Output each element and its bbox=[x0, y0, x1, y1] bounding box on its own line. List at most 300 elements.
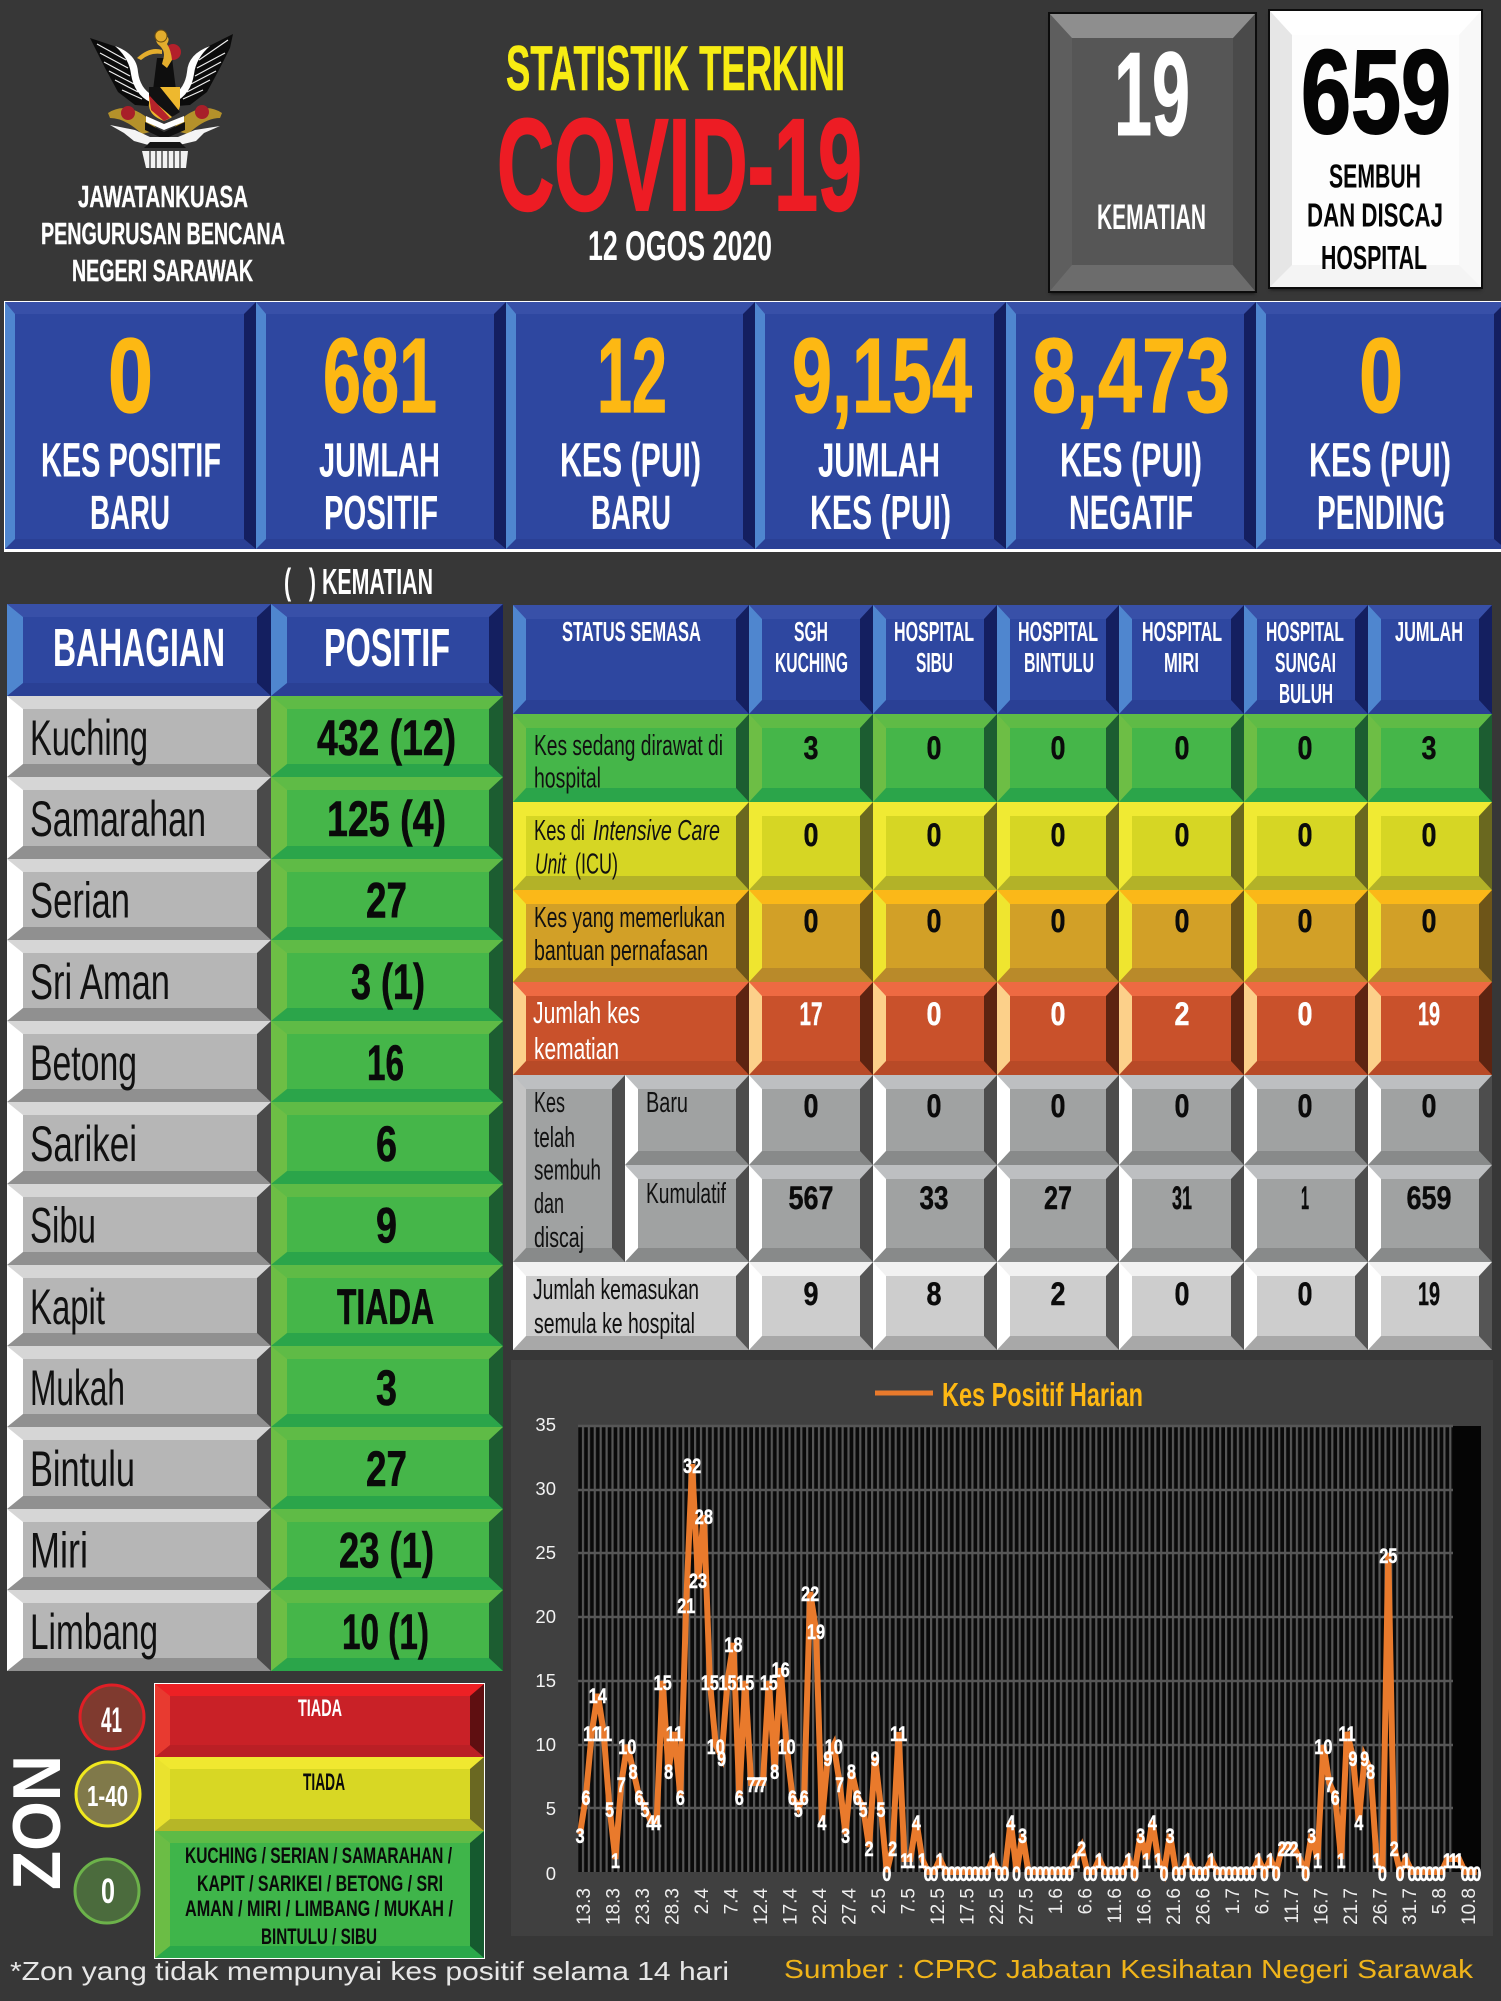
table values: 0 bbox=[926, 730, 942, 766]
table headings: BAHAGIAN bbox=[53, 618, 225, 678]
data labels: 5 bbox=[794, 1798, 803, 1821]
row: cases in hospital bbox=[513, 714, 1492, 802]
table values: 0 bbox=[804, 817, 818, 853]
data labels: 0 bbox=[1106, 1862, 1116, 1885]
row labels: Kumulatif bbox=[646, 1178, 727, 1210]
row: Kapit bbox=[7, 1265, 503, 1346]
table values: 19 bbox=[1418, 1276, 1440, 1312]
footnote: *Zon yang tidak mempunyai kes positif selama 14 hari bbox=[10, 1956, 729, 1986]
x axis date labels: 12.4 bbox=[751, 1888, 772, 1925]
data labels: 5 bbox=[859, 1798, 868, 1821]
data labels: 0 bbox=[1189, 1862, 1198, 1885]
x axis date labels: 21.6 bbox=[1164, 1888, 1185, 1925]
x axis date labels: 2.5 bbox=[869, 1888, 890, 1914]
row labels bbox=[533, 730, 727, 1340]
line: daily positive cases bbox=[580, 1464, 1477, 1872]
division names: Kapit bbox=[30, 1279, 105, 1335]
table values: 0 bbox=[804, 903, 818, 939]
column headings: SGH bbox=[794, 616, 828, 647]
positive counts: 23 (1) bbox=[339, 1522, 434, 1578]
data labels: 7 bbox=[617, 1773, 626, 1796]
card numbers: 8,473 bbox=[1032, 317, 1230, 435]
card: kes pui pending bbox=[1256, 302, 1501, 549]
card: kes pui baru bbox=[506, 302, 755, 549]
table values: 0 bbox=[1298, 817, 1312, 853]
data labels: 1 bbox=[1313, 1849, 1322, 1872]
data labels: 0 bbox=[1047, 1862, 1057, 1885]
data labels: 2 bbox=[1278, 1837, 1287, 1860]
table values: 1 bbox=[1301, 1180, 1309, 1216]
data labels: 22 bbox=[801, 1582, 819, 1605]
data labels: 8 bbox=[770, 1760, 779, 1783]
data labels: 0 bbox=[994, 1862, 1003, 1885]
row: readmissions bbox=[513, 1262, 1492, 1350]
data labels: 9 bbox=[1360, 1747, 1369, 1770]
x axis date labels: 22.5 bbox=[987, 1888, 1008, 1925]
card numbers bbox=[108, 317, 1403, 435]
zone indicator: 1 to 40 cases: 1-40 bbox=[87, 1781, 128, 1813]
data labels: 0 bbox=[1024, 1862, 1033, 1885]
data labels: 9 bbox=[717, 1747, 726, 1770]
positive counts: 125 (4) bbox=[327, 791, 446, 847]
row labels: Jumlah kemasukan bbox=[533, 1274, 699, 1306]
data labels: 0 bbox=[1407, 1862, 1416, 1885]
data labels: 10 bbox=[825, 1735, 843, 1758]
column headings: HOSPITAL bbox=[894, 616, 974, 647]
positive counts: TIADA bbox=[337, 1279, 434, 1335]
data labels: 1 bbox=[906, 1849, 915, 1872]
data labels: 0 bbox=[1053, 1862, 1062, 1885]
red zone text: TIADA bbox=[298, 1695, 342, 1722]
table values: 0 bbox=[1422, 903, 1436, 939]
table values: 0 bbox=[1298, 1088, 1312, 1124]
row: Betong bbox=[7, 1021, 503, 1102]
x axis date labels: 1.6 bbox=[1046, 1888, 1067, 1914]
plot area bbox=[578, 1426, 1481, 1872]
x axis date labels: 18.3 bbox=[604, 1888, 624, 1925]
x axis date labels: 1.7 bbox=[1223, 1888, 1244, 1914]
x axis date labels: 11.6 bbox=[1105, 1888, 1126, 1924]
data labels: 6 bbox=[634, 1786, 644, 1809]
data labels: 21 bbox=[677, 1594, 695, 1617]
row labels: Kes di bbox=[534, 815, 585, 847]
card labels: KES POSITIF bbox=[41, 434, 221, 488]
data labels: 0 bbox=[1065, 1862, 1074, 1885]
data labels: 0 bbox=[1230, 1862, 1239, 1885]
data labels: 1 bbox=[1142, 1849, 1151, 1872]
heading: statistik terkini: STATISTIK TERKINI bbox=[506, 34, 845, 104]
zone indicator: 1 to 40 cases bbox=[76, 1762, 140, 1826]
data labels: 1 bbox=[611, 1849, 620, 1872]
data labels: 2 bbox=[888, 1837, 897, 1860]
data labels: 0 bbox=[1195, 1862, 1204, 1885]
y axis labels: 5 bbox=[546, 1798, 556, 1819]
data labels: 1 bbox=[1443, 1849, 1452, 1872]
x axis date labels: 31.7 bbox=[1400, 1888, 1421, 1925]
data labels: 0 bbox=[882, 1862, 891, 1885]
data labels: 0 bbox=[1419, 1862, 1428, 1885]
table values: 3 bbox=[1422, 730, 1436, 766]
data labels: 0 bbox=[1036, 1862, 1045, 1885]
row labels: Unit bbox=[535, 849, 567, 881]
table values: 0 bbox=[804, 1088, 818, 1124]
data labels: 6 bbox=[676, 1786, 685, 1809]
data labels: 0 bbox=[1431, 1862, 1440, 1885]
data labels: 0 bbox=[971, 1862, 980, 1885]
data labels: 4 bbox=[1006, 1811, 1016, 1834]
x axis date labels: 16.7 bbox=[1312, 1888, 1332, 1925]
data labels: 0 bbox=[924, 1862, 933, 1885]
table values: 0 bbox=[1298, 903, 1312, 939]
panel: deaths bbox=[1050, 14, 1255, 291]
data labels: 7 bbox=[1325, 1773, 1334, 1796]
data labels: 18 bbox=[724, 1633, 743, 1656]
division names: Betong bbox=[30, 1035, 137, 1091]
table values: 0 bbox=[1174, 817, 1190, 853]
text: committee name: PENGURUSAN BENCANA bbox=[41, 216, 285, 251]
row: recovered cumulative bbox=[625, 1165, 1492, 1262]
division names: Mukah bbox=[30, 1360, 125, 1416]
table values: 0 bbox=[1050, 903, 1066, 939]
positive counts: 3 (1) bbox=[351, 954, 425, 1010]
division names: Miri bbox=[30, 1522, 88, 1578]
zone indicator: 0 cases bbox=[75, 1859, 139, 1923]
data labels: 1 bbox=[1207, 1849, 1216, 1872]
x axis date labels: 26.7 bbox=[1370, 1888, 1392, 1925]
data labels: 1 bbox=[1095, 1849, 1104, 1872]
row: Serian bbox=[7, 859, 503, 940]
note: brackets mean deaths: ( ) KEMATIAN bbox=[284, 561, 433, 602]
data labels: 0 bbox=[1272, 1862, 1281, 1885]
x axis date labels: 26.6 bbox=[1194, 1888, 1214, 1925]
data labels: 0 bbox=[1171, 1862, 1180, 1885]
x axis date labels: 27.4 bbox=[840, 1888, 860, 1925]
death row values bbox=[800, 996, 1440, 1032]
chart legend: Kes Positif Harian bbox=[942, 1376, 1143, 1413]
zone row: green bbox=[155, 1831, 484, 1958]
card labels: BARU bbox=[90, 487, 170, 540]
death row values: 0 bbox=[1298, 996, 1312, 1032]
data labels: 0 bbox=[1260, 1862, 1269, 1885]
source: Sumber : CPRC Jabatan Kesihatan Negeri Sarawak bbox=[784, 1954, 1474, 1984]
data labels: 0 bbox=[1201, 1862, 1210, 1885]
table values: 0 bbox=[1422, 817, 1436, 853]
table values: 8 bbox=[926, 1276, 942, 1312]
data labels: 0 bbox=[1437, 1862, 1446, 1885]
y axis labels bbox=[535, 1414, 556, 1884]
data labels: 0 bbox=[1248, 1862, 1257, 1885]
data labels: 1 bbox=[1337, 1849, 1346, 1872]
panel: hospital status table bbox=[513, 605, 1492, 1350]
green zone text: BINTULU / SIBU bbox=[261, 1924, 377, 1949]
data labels: 11 bbox=[1338, 1722, 1356, 1745]
data labels: 0 bbox=[1213, 1862, 1222, 1885]
green zone text: AMAN / MIRI / LIMBANG / MUKAH / bbox=[185, 1896, 454, 1921]
data labels: 0 bbox=[1101, 1862, 1110, 1885]
x axis date labels: 6.7 bbox=[1252, 1888, 1274, 1914]
x axis date labels: 6.6 bbox=[1076, 1888, 1096, 1914]
row: recovered new bbox=[625, 1075, 1492, 1165]
panel: zone table bbox=[154, 1683, 485, 1959]
green zone text bbox=[185, 1843, 454, 1949]
division names: Sarikei bbox=[30, 1116, 137, 1172]
death row values: 2 bbox=[1174, 996, 1190, 1032]
row labels: bantuan pernafasan bbox=[534, 935, 708, 967]
green zone text: KUCHING / SERIAN / SAMARAHAN / bbox=[185, 1843, 453, 1868]
data labels: 0 bbox=[1413, 1862, 1422, 1885]
data labels: 11 bbox=[666, 1722, 683, 1745]
x axis date labels: 28.3 bbox=[662, 1888, 684, 1925]
data labels: 2 bbox=[1077, 1837, 1086, 1860]
table values: 0 bbox=[1174, 1276, 1190, 1312]
label: sembuh dan discaj hospital bbox=[1307, 158, 1443, 276]
header: emblem and committee name bbox=[41, 30, 285, 288]
green zone text: KAPIT / SARIKEI / BETONG / SRI bbox=[197, 1871, 443, 1896]
data labels: 0 bbox=[1130, 1862, 1139, 1885]
division names: Bintulu bbox=[30, 1441, 135, 1497]
row: Limbang bbox=[7, 1590, 503, 1671]
data labels: 0 bbox=[1118, 1862, 1127, 1885]
table header row bbox=[513, 605, 1492, 714]
positive counts: 3 bbox=[376, 1360, 397, 1416]
division names: Limbang bbox=[30, 1604, 158, 1660]
data labels: 10 bbox=[1314, 1735, 1333, 1758]
data labels: 0 bbox=[1083, 1862, 1092, 1885]
data labels: 6 bbox=[581, 1786, 590, 1809]
table values: 0 bbox=[926, 817, 942, 853]
data labels: 7 bbox=[752, 1773, 762, 1796]
data labels: 0 bbox=[1160, 1862, 1169, 1885]
table values: 0 bbox=[1050, 1088, 1066, 1124]
data labels: 2 bbox=[1289, 1837, 1298, 1860]
data labels: 0 bbox=[977, 1862, 986, 1885]
panel: recovered and discharged bbox=[1270, 11, 1481, 287]
data labels: 2 bbox=[1283, 1837, 1293, 1860]
table values: 0 bbox=[1298, 730, 1312, 766]
death row values: 0 bbox=[1050, 996, 1066, 1032]
yellow zone text: TIADA bbox=[303, 1769, 345, 1796]
table values: 2 bbox=[1050, 1276, 1066, 1312]
y axis labels: 30 bbox=[535, 1478, 556, 1499]
text: committee name bbox=[41, 179, 285, 288]
data labels: 9 bbox=[870, 1747, 880, 1770]
card numbers: 0 bbox=[108, 317, 153, 435]
column headings bbox=[562, 616, 1463, 709]
data labels: 7 bbox=[747, 1773, 756, 1796]
card numbers: 12 bbox=[597, 317, 667, 435]
data labels: 3 bbox=[1307, 1824, 1316, 1847]
card labels: BARU bbox=[591, 487, 671, 540]
data labels: 0 bbox=[959, 1862, 968, 1885]
data labels: 10 bbox=[618, 1735, 636, 1758]
table headings: POSITIF bbox=[324, 618, 450, 678]
x axis date labels: 2.4 bbox=[692, 1888, 713, 1914]
zone indicator: 0 cases: 0 bbox=[101, 1872, 115, 1911]
y axis labels: 0 bbox=[546, 1863, 556, 1884]
row label: jumlah kes kematian bbox=[533, 995, 640, 1066]
row: Miri bbox=[7, 1509, 503, 1590]
data labels: 28 bbox=[695, 1505, 713, 1528]
data labels: 1 bbox=[1372, 1849, 1381, 1872]
column headings: STATUS SEMASA bbox=[562, 616, 701, 647]
data labels: 0 bbox=[929, 1862, 939, 1885]
data labels: 2 bbox=[1390, 1837, 1399, 1860]
data labels: 4 bbox=[646, 1811, 656, 1834]
data labels: 32 bbox=[683, 1454, 701, 1477]
x axis date labels: 21.7 bbox=[1341, 1888, 1362, 1925]
data labels: 0 bbox=[1059, 1862, 1068, 1885]
x axis date labels: 27.5 bbox=[1016, 1888, 1038, 1925]
data labels: 15 bbox=[760, 1671, 778, 1694]
card: jumlah kes pui bbox=[755, 302, 1006, 549]
data labels: 0 bbox=[1224, 1862, 1234, 1885]
data labels: 1 bbox=[1266, 1849, 1275, 1872]
x axis date labels: 16.6 bbox=[1134, 1888, 1156, 1925]
y axis labels: 20 bbox=[535, 1606, 556, 1627]
data labels: 0 bbox=[1466, 1862, 1475, 1885]
data labels: 23 bbox=[689, 1569, 707, 1592]
table values: 3 bbox=[804, 730, 818, 766]
x axis date labels: 17.5 bbox=[958, 1888, 978, 1925]
data labels: 15 bbox=[718, 1671, 737, 1694]
death row values: 17 bbox=[800, 996, 822, 1032]
data labels: 19 bbox=[807, 1620, 825, 1643]
card labels bbox=[41, 434, 1451, 540]
data labels: 10 bbox=[777, 1735, 796, 1758]
zone row: red bbox=[155, 1684, 484, 1757]
data labels: 9 bbox=[1348, 1747, 1357, 1770]
cell: recovered and discharged label bbox=[513, 1075, 625, 1262]
label: ZON: ZON bbox=[0, 1755, 75, 1890]
data labels: 5 bbox=[876, 1798, 885, 1821]
table values: 0 bbox=[1422, 1088, 1436, 1124]
data labels: 8 bbox=[629, 1760, 638, 1783]
card numbers: 681 bbox=[323, 317, 437, 435]
positive counts: 9 bbox=[376, 1198, 397, 1254]
data labels: 3 bbox=[575, 1824, 585, 1847]
card: kes positif baru bbox=[5, 302, 256, 549]
data labels: 1 bbox=[1449, 1849, 1458, 1872]
card labels: KES (PUI) bbox=[810, 487, 951, 540]
division names bbox=[30, 710, 206, 1660]
data labels: 0 bbox=[1378, 1862, 1387, 1885]
text: committee name: NEGERI SARAWAK bbox=[72, 253, 253, 288]
positive counts: 10 (1) bbox=[342, 1604, 429, 1660]
row: Mukah bbox=[7, 1346, 503, 1427]
x axis date labels: 17.4 bbox=[780, 1888, 802, 1925]
data labels: 6 bbox=[788, 1786, 797, 1809]
column headings: BULUH bbox=[1279, 678, 1333, 709]
data labels: 6 bbox=[1331, 1786, 1340, 1809]
death row values: 0 bbox=[926, 996, 942, 1032]
data labels: 0 bbox=[1301, 1862, 1310, 1885]
data labels: 5 bbox=[605, 1798, 614, 1821]
card labels: KES (PUI) bbox=[560, 434, 701, 488]
data labels: 0 bbox=[1112, 1862, 1121, 1885]
table values: 0 bbox=[1174, 903, 1190, 939]
row: Sri Aman bbox=[7, 940, 503, 1021]
data labels: 15 bbox=[736, 1671, 754, 1694]
data labels: 6 bbox=[800, 1786, 809, 1809]
zone row: yellow bbox=[155, 1757, 484, 1831]
panel: daily positive cases chart bbox=[511, 1360, 1493, 1936]
data labels: 3 bbox=[1136, 1824, 1145, 1847]
column headings: BINTULU bbox=[1024, 647, 1094, 678]
data labels: 3 bbox=[1018, 1824, 1027, 1847]
division names: Samarahan bbox=[30, 791, 206, 847]
data labels: 0 bbox=[1042, 1862, 1051, 1885]
data labels: 7 bbox=[758, 1773, 767, 1796]
row labels: telah bbox=[534, 1122, 575, 1154]
card labels: NEGATIF bbox=[1069, 487, 1193, 540]
table header row bbox=[7, 604, 503, 696]
data labels: 0 bbox=[941, 1862, 950, 1885]
row labels: Kes sedang dirawat di bbox=[534, 730, 723, 762]
table values: 9 bbox=[804, 1276, 818, 1312]
data labels: 16 bbox=[771, 1658, 790, 1681]
zone indicator: 41 cases: 41 bbox=[101, 1701, 122, 1740]
table values: 0 bbox=[1050, 730, 1066, 766]
footer: notes and source bbox=[10, 1954, 1474, 1986]
data labels: 1 bbox=[1254, 1849, 1263, 1872]
row labels: Kes bbox=[534, 1087, 565, 1119]
data labels: 1 bbox=[1455, 1849, 1464, 1872]
row: deaths bbox=[513, 982, 1492, 1075]
data labels: 15 bbox=[701, 1671, 719, 1694]
data labels: 6 bbox=[853, 1786, 862, 1809]
y axis labels: 35 bbox=[535, 1414, 556, 1435]
table values: 659 bbox=[1406, 1180, 1452, 1216]
x axis date labels bbox=[574, 1888, 1480, 1925]
data labels: 7 bbox=[835, 1773, 844, 1796]
data labels: 0 bbox=[1460, 1862, 1470, 1885]
data labels: 11 bbox=[595, 1722, 612, 1745]
data labels: 0 bbox=[947, 1862, 956, 1885]
data labels: 1 bbox=[900, 1849, 909, 1872]
data labels: 8 bbox=[1366, 1760, 1375, 1783]
data labels: 0 bbox=[1472, 1862, 1481, 1885]
data labels: 4 bbox=[912, 1811, 921, 1834]
data labels: 9 bbox=[823, 1747, 832, 1770]
row labels: hospital bbox=[534, 762, 601, 794]
panel: blue summary cards bbox=[4, 301, 1501, 552]
x axis date labels: 7.5 bbox=[898, 1888, 920, 1914]
data labels: 8 bbox=[847, 1760, 856, 1783]
row labels: (ICU) bbox=[575, 849, 618, 881]
data labels: 11 bbox=[890, 1722, 907, 1745]
card: kes pui negatif bbox=[1006, 302, 1256, 549]
column headings: SIBU bbox=[916, 647, 953, 678]
row: breathing support bbox=[513, 890, 1492, 982]
data labels: 0 bbox=[1236, 1862, 1245, 1885]
data labels: 3 bbox=[1165, 1824, 1175, 1847]
division names: Sibu bbox=[30, 1198, 96, 1254]
data labels: 0 bbox=[1242, 1862, 1251, 1885]
icon: Sarawak coat of arms bbox=[90, 30, 233, 168]
data labels: 1 bbox=[1401, 1849, 1411, 1872]
y axis labels: 25 bbox=[535, 1542, 556, 1563]
data labels: 4 bbox=[1354, 1811, 1364, 1834]
column headings: HOSPITAL bbox=[1266, 616, 1344, 647]
heading: covid-19: COVID-19 bbox=[497, 91, 862, 238]
data labels: 10 bbox=[707, 1735, 725, 1758]
row: Kuching bbox=[7, 696, 503, 777]
column headings: HOSPITAL bbox=[1142, 616, 1222, 647]
data labels: 5 bbox=[640, 1798, 649, 1821]
number: 659 recovered: 659 bbox=[1301, 26, 1451, 159]
data labels: 0 bbox=[1425, 1862, 1434, 1885]
card labels: KES (PUI) bbox=[1060, 434, 1202, 488]
